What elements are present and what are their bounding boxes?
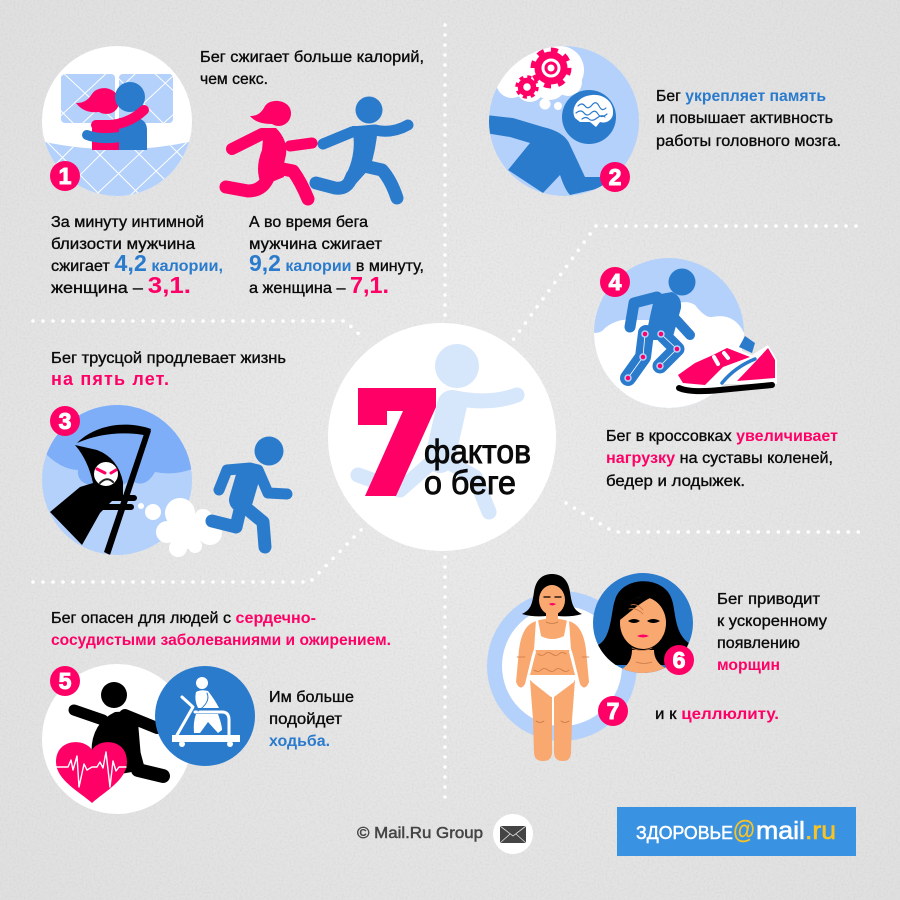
icon: treadmill [155, 666, 255, 766]
text: fact 4: нагрузку на суставы коленей, [606, 450, 833, 467]
text: fact 2: и повышает активность [656, 110, 833, 127]
panel 3: reaper illustration [40, 400, 287, 557]
central title badge [328, 323, 556, 551]
text: intimacy calories: близости мужчина [51, 236, 195, 253]
text: fact 6: Бег приводит [717, 591, 821, 608]
text: fact 6: к ускоренному [717, 613, 827, 630]
icon: fleeing runner [212, 436, 287, 547]
badge 1 [50, 161, 80, 191]
text: fact 4: бедер и лодыжек. [606, 473, 745, 490]
text: fact 5: сосудистыми заболеваниями и ожирением. [51, 632, 391, 649]
panel 6: wrinkled face [593, 573, 694, 675]
icon: woman figure [516, 574, 589, 761]
icon: embracing couple [76, 82, 147, 150]
text: intimacy calories: сжигает 4,2 калории, [51, 250, 223, 276]
title text [424, 433, 531, 501]
title text: фактов [424, 433, 531, 470]
running figure, close-up [485, 115, 605, 195]
icon: overweight runner [74, 682, 163, 778]
title text: о беге [424, 464, 516, 501]
text: intimacy calories: женщина – 3,1. [51, 272, 191, 298]
badge 2 [600, 162, 630, 192]
text: fact 3: на пять лет. [51, 369, 169, 389]
logo: .ru [805, 817, 836, 845]
text: running calories: а женщина – 7,1. [249, 272, 389, 298]
icon: pink runner [226, 101, 312, 199]
heading: fact 1: Бег сжигает больше калорий, [200, 49, 424, 66]
text: fact 3: Бег трусцой продлевает жизнь [51, 350, 286, 367]
text: intimacy calories [51, 214, 223, 298]
copyright: © Mail.Ru Group [357, 825, 483, 842]
big number 7 [358, 388, 436, 496]
thought cloud [497, 46, 584, 110]
panel 4: joints illustration [590, 258, 777, 410]
text: walking advice: Им больше [269, 689, 354, 706]
text: walking advice [269, 689, 354, 750]
icon: small gear [517, 77, 537, 97]
badge 6: 6 [673, 647, 685, 673]
logo [617, 807, 856, 856]
text: walking advice: подойдет [269, 711, 343, 728]
text: fact 5: Бег опасен для людей с сердечно- [51, 610, 316, 627]
logo: ЗДОРОВЬЕ [636, 823, 733, 843]
icon: envelope [493, 814, 533, 854]
panel 5: heart risk illustration [42, 664, 255, 814]
panel 7: cellulite illustration [487, 574, 637, 761]
logo: @ [733, 814, 755, 844]
text: fact 2: работы головного мозга. [656, 133, 841, 150]
heading: fact 1 [200, 49, 424, 88]
text: fact 4: Бег в кроссовках увеличивает [606, 428, 838, 445]
panel 1: bed illustration [42, 46, 192, 196]
text: running calories: мужчина сжигает [249, 236, 383, 253]
text: intimacy calories: За минуту интимной [51, 214, 204, 231]
icon: big gear [533, 50, 569, 86]
text: fact 7: и к целлюлиту. [655, 706, 779, 723]
icon: dust puffs [138, 498, 222, 557]
badge 3: 3 [59, 408, 71, 434]
badge 2: 2 [609, 164, 621, 190]
badge 7 [598, 696, 628, 726]
badge 4 [600, 267, 630, 297]
icon: grim reaper [50, 425, 151, 555]
logo: mail [756, 817, 805, 845]
text: running calories [249, 214, 424, 298]
icon: brain [562, 90, 616, 144]
icon: pillows [61, 74, 173, 123]
icon: figure with joints [625, 268, 696, 381]
badge 1: 1 [59, 163, 72, 189]
text: fact 2: Бег укрепляет память [656, 88, 826, 105]
text: fact 5 [51, 610, 391, 649]
text: fact 3 [51, 350, 286, 389]
text: fact 4 [606, 428, 838, 490]
text: running calories: 9,2 калории в минуту, [249, 250, 424, 276]
text: fact 2 [656, 88, 841, 150]
badge 4: 4 [609, 269, 622, 295]
badge 5: 5 [59, 668, 72, 694]
icon: blanket [45, 142, 189, 196]
text: walking advice: ходьба. [269, 733, 330, 750]
text: fact 6: появлению [717, 635, 800, 652]
icon: heart with pulse [56, 742, 127, 803]
badge 5 [50, 666, 80, 696]
badge 7: 7 [607, 698, 619, 724]
text: fact 6 [717, 591, 827, 674]
badge 3 [50, 406, 80, 436]
text: running calories: А во время бега [249, 214, 368, 231]
icon: blue runner [316, 96, 408, 198]
heading: fact 1: чем секс. [200, 71, 268, 88]
icon: running shoe [676, 336, 777, 391]
text: fact 6: морщин [717, 657, 780, 674]
icon: pale runner [358, 344, 517, 512]
panel 2: memory illustration [485, 35, 639, 196]
